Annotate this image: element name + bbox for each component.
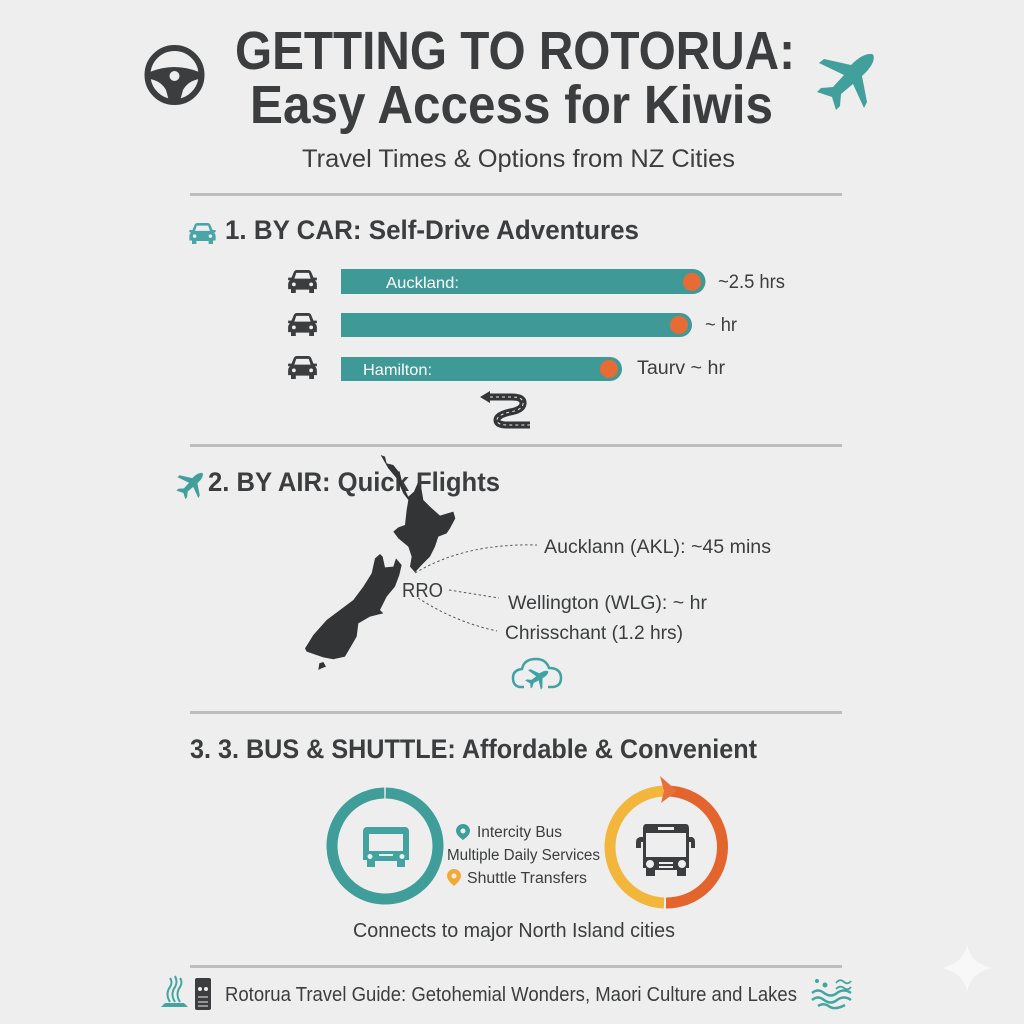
flight routes <box>415 545 537 631</box>
route labels: Wellington (WLG): ~ hr <box>508 593 708 614</box>
list: services: Intercity Bus <box>477 824 562 841</box>
icon: winding road <box>480 391 530 425</box>
route labels: Aucklann (AKL): ~45 mins <box>544 537 771 558</box>
list: services: Shuttle Transfers <box>467 870 587 887</box>
footer text: Rotorua Travel Guide: Getohemial Wonders, Maori Culture and Lakes <box>225 984 797 1006</box>
icon: small teal plane <box>176 473 203 499</box>
list: services: Multiple Daily Services <box>447 847 600 864</box>
route labels <box>505 537 771 644</box>
title: Easy Access for Kiwis <box>250 75 773 135</box>
subtitle: Travel Times & Options from NZ Cities <box>302 145 735 173</box>
decorative sparkle <box>942 944 992 992</box>
title <box>235 21 795 135</box>
caption: Connects to major North Island cities <box>353 920 675 942</box>
icon: tiki carving <box>195 978 211 1010</box>
yellow and orange ring with bus <box>610 776 723 903</box>
heading: by air: 2. BY AIR: Quick Flights <box>208 467 500 497</box>
row: Auckland: Auckland: <box>386 275 459 292</box>
row: unnamed city <box>288 313 738 337</box>
icon: teal car <box>189 223 216 244</box>
heading: by car: 1. BY CAR: Self-Drive Adventures <box>225 215 639 245</box>
icon: yellow pin <box>447 869 461 886</box>
label: RRO: RRO <box>402 580 443 602</box>
row: Hamilton: Taurv ~ hr <box>637 358 726 379</box>
row: unnamed city: ~ hr <box>705 315 738 336</box>
icon: geothermal steam <box>161 976 188 1007</box>
panel: by car <box>189 215 785 425</box>
icon: cloud with plane <box>513 659 561 691</box>
footer <box>161 976 851 1010</box>
row: Auckland <box>288 269 785 294</box>
row: Hamilton <box>288 356 726 381</box>
icon: steering wheel <box>148 48 202 102</box>
row: Auckland: ~2.5 hrs <box>718 272 785 293</box>
panel: by air <box>176 455 771 691</box>
icon: teal pin <box>456 824 470 840</box>
icon: lake waves <box>812 979 851 1008</box>
heading: bus and shuttle: 3. 3. BUS & SHUTTLE: Affordable & Convenient <box>190 734 757 764</box>
list: services <box>447 824 600 887</box>
route labels: Chrisschant (1.2 hrs) <box>505 623 683 644</box>
title: GETTING TO ROTORUA: <box>235 21 795 81</box>
teal ring with bus <box>332 793 438 899</box>
row: Hamilton: Hamilton: <box>363 362 432 379</box>
map: New Zealand <box>305 455 455 670</box>
icon: teal plane <box>817 54 874 110</box>
panel: bus and shuttle <box>190 734 757 942</box>
